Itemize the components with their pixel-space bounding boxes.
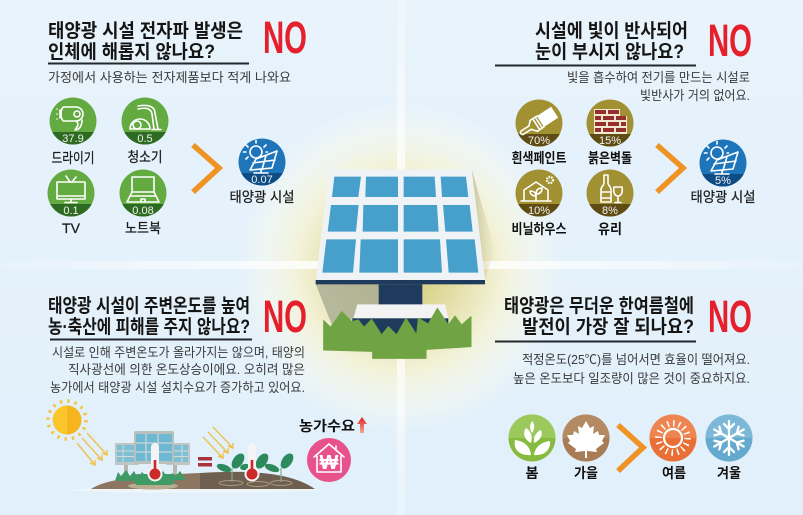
heading bbox=[495, 20, 696, 66]
description: 시설로 인해 주변온도가 올라가지는 않으며, 태양의 bbox=[52, 345, 305, 360]
NO mark: NO bbox=[708, 291, 752, 342]
illustration: field with solar panels and crops bbox=[71, 431, 319, 493]
labels: seasons bbox=[526, 465, 741, 481]
icon: laptop 0.08 bbox=[119, 170, 167, 217]
icon: winter bbox=[706, 414, 752, 462]
icon: greenhouse 10%: 10% bbox=[528, 205, 550, 217]
icon: house with won: ₩ bbox=[320, 452, 339, 474]
arrows: sunlight on panels bbox=[77, 433, 107, 465]
icon: white paint 70%: 70% bbox=[528, 135, 550, 147]
heading: 인체에 해롭지 않나요? bbox=[48, 41, 215, 63]
heading: 눈이 부시지 않나요? bbox=[535, 41, 684, 63]
arrows: sunlight on crops bbox=[203, 427, 233, 458]
icon: thermometer at panels bbox=[148, 443, 162, 482]
heading bbox=[495, 295, 696, 342]
description: 가정에서 사용하는 전자제품보다 적게 나와요 bbox=[48, 70, 291, 85]
icon: hair dryer 37.9: 37.9 bbox=[62, 133, 84, 145]
labels: seasons: 봄 bbox=[526, 465, 539, 481]
NO mark: NO bbox=[263, 291, 307, 342]
labels: appliances: 드라이기 bbox=[52, 150, 94, 166]
icon: TV 0.1: 0.1 bbox=[63, 205, 79, 217]
labels: appliances: 노트북 bbox=[125, 220, 161, 236]
icon: solar facility 5% bbox=[699, 140, 747, 187]
heading: 태양광 시설이 주변온도를 높여 bbox=[48, 295, 250, 317]
description: 빛을 흡수하여 전기를 만드는 시설로 bbox=[567, 70, 750, 85]
heading bbox=[48, 20, 249, 64]
icon: laptop 0.08: 0.08 bbox=[132, 205, 154, 217]
icon: crops bbox=[216, 451, 296, 486]
icon: hair dryer 37.9 bbox=[49, 98, 97, 145]
labels: appliances bbox=[52, 149, 162, 236]
icon: red brick 15% bbox=[586, 100, 634, 147]
description: 농가에서 태양광 시설 설치수요가 증가하고 있어요. bbox=[50, 380, 305, 395]
icon: vacuum cleaner 0.5 bbox=[121, 98, 169, 145]
heading: 발전이 가장 잘 되나요? bbox=[522, 316, 694, 338]
icon: house with won bbox=[307, 438, 351, 482]
labels: seasons: 겨울 bbox=[717, 465, 741, 481]
description bbox=[50, 345, 305, 395]
labels: materials: 비닐하우스 bbox=[512, 221, 567, 237]
description: 적정온도(25℃)를 넘어서면 효율이 떨어져요. bbox=[522, 352, 750, 367]
description bbox=[513, 352, 750, 386]
labels: appliances: TV bbox=[62, 220, 81, 236]
labels: materials: 붉은벽돌 bbox=[588, 150, 632, 166]
icon: solar facility 0.07: 0.07 bbox=[251, 174, 273, 186]
icon: greenhouse 10% bbox=[515, 170, 563, 217]
panel: light reflection bbox=[495, 15, 756, 237]
central solar panel bbox=[316, 169, 495, 358]
labels: seasons: 가을 bbox=[574, 465, 598, 481]
label: farm demand: 농가수요 bbox=[299, 418, 355, 434]
description: 직사광선에 의한 온도상승이에요. 오히려 많은 bbox=[68, 362, 305, 377]
arrow: greater than bbox=[657, 145, 683, 192]
icon: vacuum cleaner 0.5: 0.5 bbox=[137, 133, 153, 145]
icon: autumn bbox=[562, 414, 610, 462]
labels: materials bbox=[512, 150, 632, 237]
label: solar facility: 태양광 시설 bbox=[230, 189, 294, 205]
panel: electromagnetic waves bbox=[47, 12, 307, 236]
icon: spring bbox=[508, 414, 556, 462]
icon: solar facility 5%: 5% bbox=[715, 175, 731, 187]
panel: hot summer bbox=[495, 291, 752, 481]
heading: 태양광은 무더운 한여름철에 bbox=[504, 295, 694, 317]
arrow: greater than bbox=[193, 145, 219, 192]
icon: white paint 70% bbox=[515, 100, 563, 147]
icon: TV 0.1 bbox=[47, 170, 95, 217]
icon: red brick 15%: 15% bbox=[599, 135, 621, 147]
icon: summer bbox=[650, 414, 696, 462]
icon: glass bottle 8%: 8% bbox=[602, 205, 618, 217]
arrow: demand up bbox=[357, 417, 367, 433]
heading: 농·축산에 피해를 주지 않나요? bbox=[48, 316, 250, 338]
heading: 태양광 시설 전자파 발생은 bbox=[48, 20, 243, 42]
panel: ambient temperature bbox=[48, 291, 367, 493]
label: solar facility: 태양광 시설 bbox=[690, 189, 756, 205]
NO mark: NO bbox=[263, 12, 307, 63]
labels: materials: 유리 bbox=[598, 221, 622, 237]
labels: appliances: 청소기 bbox=[128, 149, 162, 165]
description: 높은 온도보다 일조량이 많은 것이 중요하지요. bbox=[513, 371, 750, 386]
description bbox=[567, 70, 750, 103]
mark: equals bbox=[198, 457, 212, 466]
icon: sun bbox=[48, 401, 86, 439]
NO mark: NO bbox=[708, 15, 752, 66]
icon: thermometer at crops bbox=[244, 443, 260, 482]
labels: materials: 흰색페인트 bbox=[512, 150, 567, 166]
arrow: greater than bbox=[618, 425, 643, 471]
description: 빛반사가 거의 없어요. bbox=[640, 88, 750, 103]
icon: solar facility 0.07 bbox=[238, 138, 286, 186]
labels: seasons: 여름 bbox=[662, 465, 686, 481]
heading bbox=[48, 295, 252, 340]
heading: 시설에 빛이 반사되어 bbox=[535, 20, 688, 42]
icon: glass bottle 8% bbox=[586, 170, 634, 217]
